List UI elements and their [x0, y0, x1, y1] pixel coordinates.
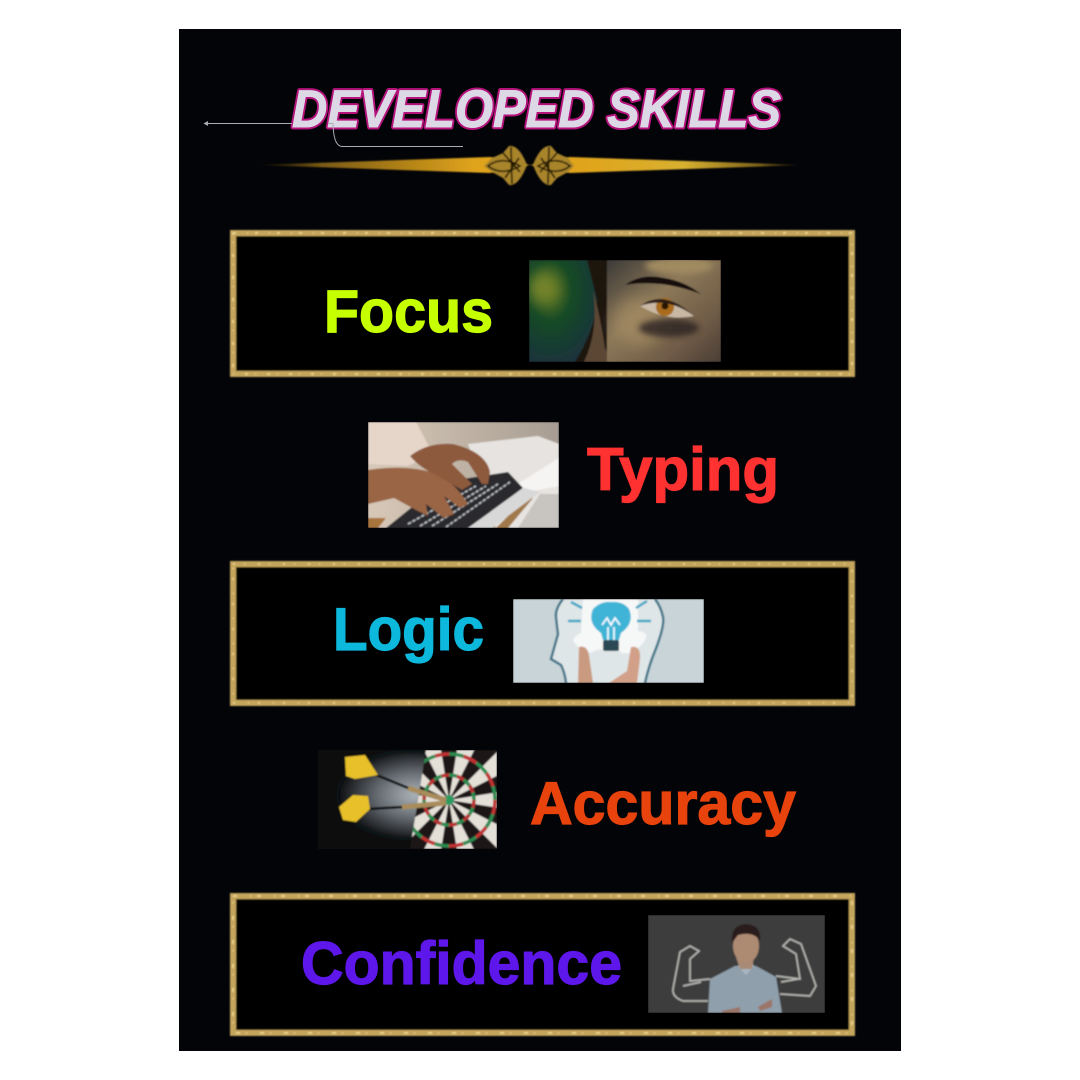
photo: hands typing	[368, 422, 559, 528]
label: Logic: Logic	[333, 596, 484, 663]
photo: darts on dartboard	[318, 750, 497, 849]
thin connector lines with arrow	[204, 122, 463, 146]
panel: Confidence frame	[233, 896, 852, 1033]
title: Developed Skills: DEVELOPED SKILLS	[292, 80, 781, 139]
panel: Focus frame	[233, 233, 852, 374]
label: Typing: Typing	[587, 436, 779, 503]
title: Developed Skills: DEVELOPED SKILLS	[292, 80, 781, 139]
panel: Logic frame	[233, 564, 852, 703]
gold ornamental divider	[255, 146, 805, 185]
photo: man with chalk muscles	[648, 915, 825, 1013]
poster background panel	[179, 29, 901, 1051]
label: Focus: Focus	[324, 278, 493, 345]
label: Accuracy: Accuracy	[530, 770, 797, 837]
photo: eye	[529, 258, 721, 362]
photo: lightbulb puzzle head	[513, 599, 704, 683]
label: Confidence: Confidence	[301, 930, 622, 997]
